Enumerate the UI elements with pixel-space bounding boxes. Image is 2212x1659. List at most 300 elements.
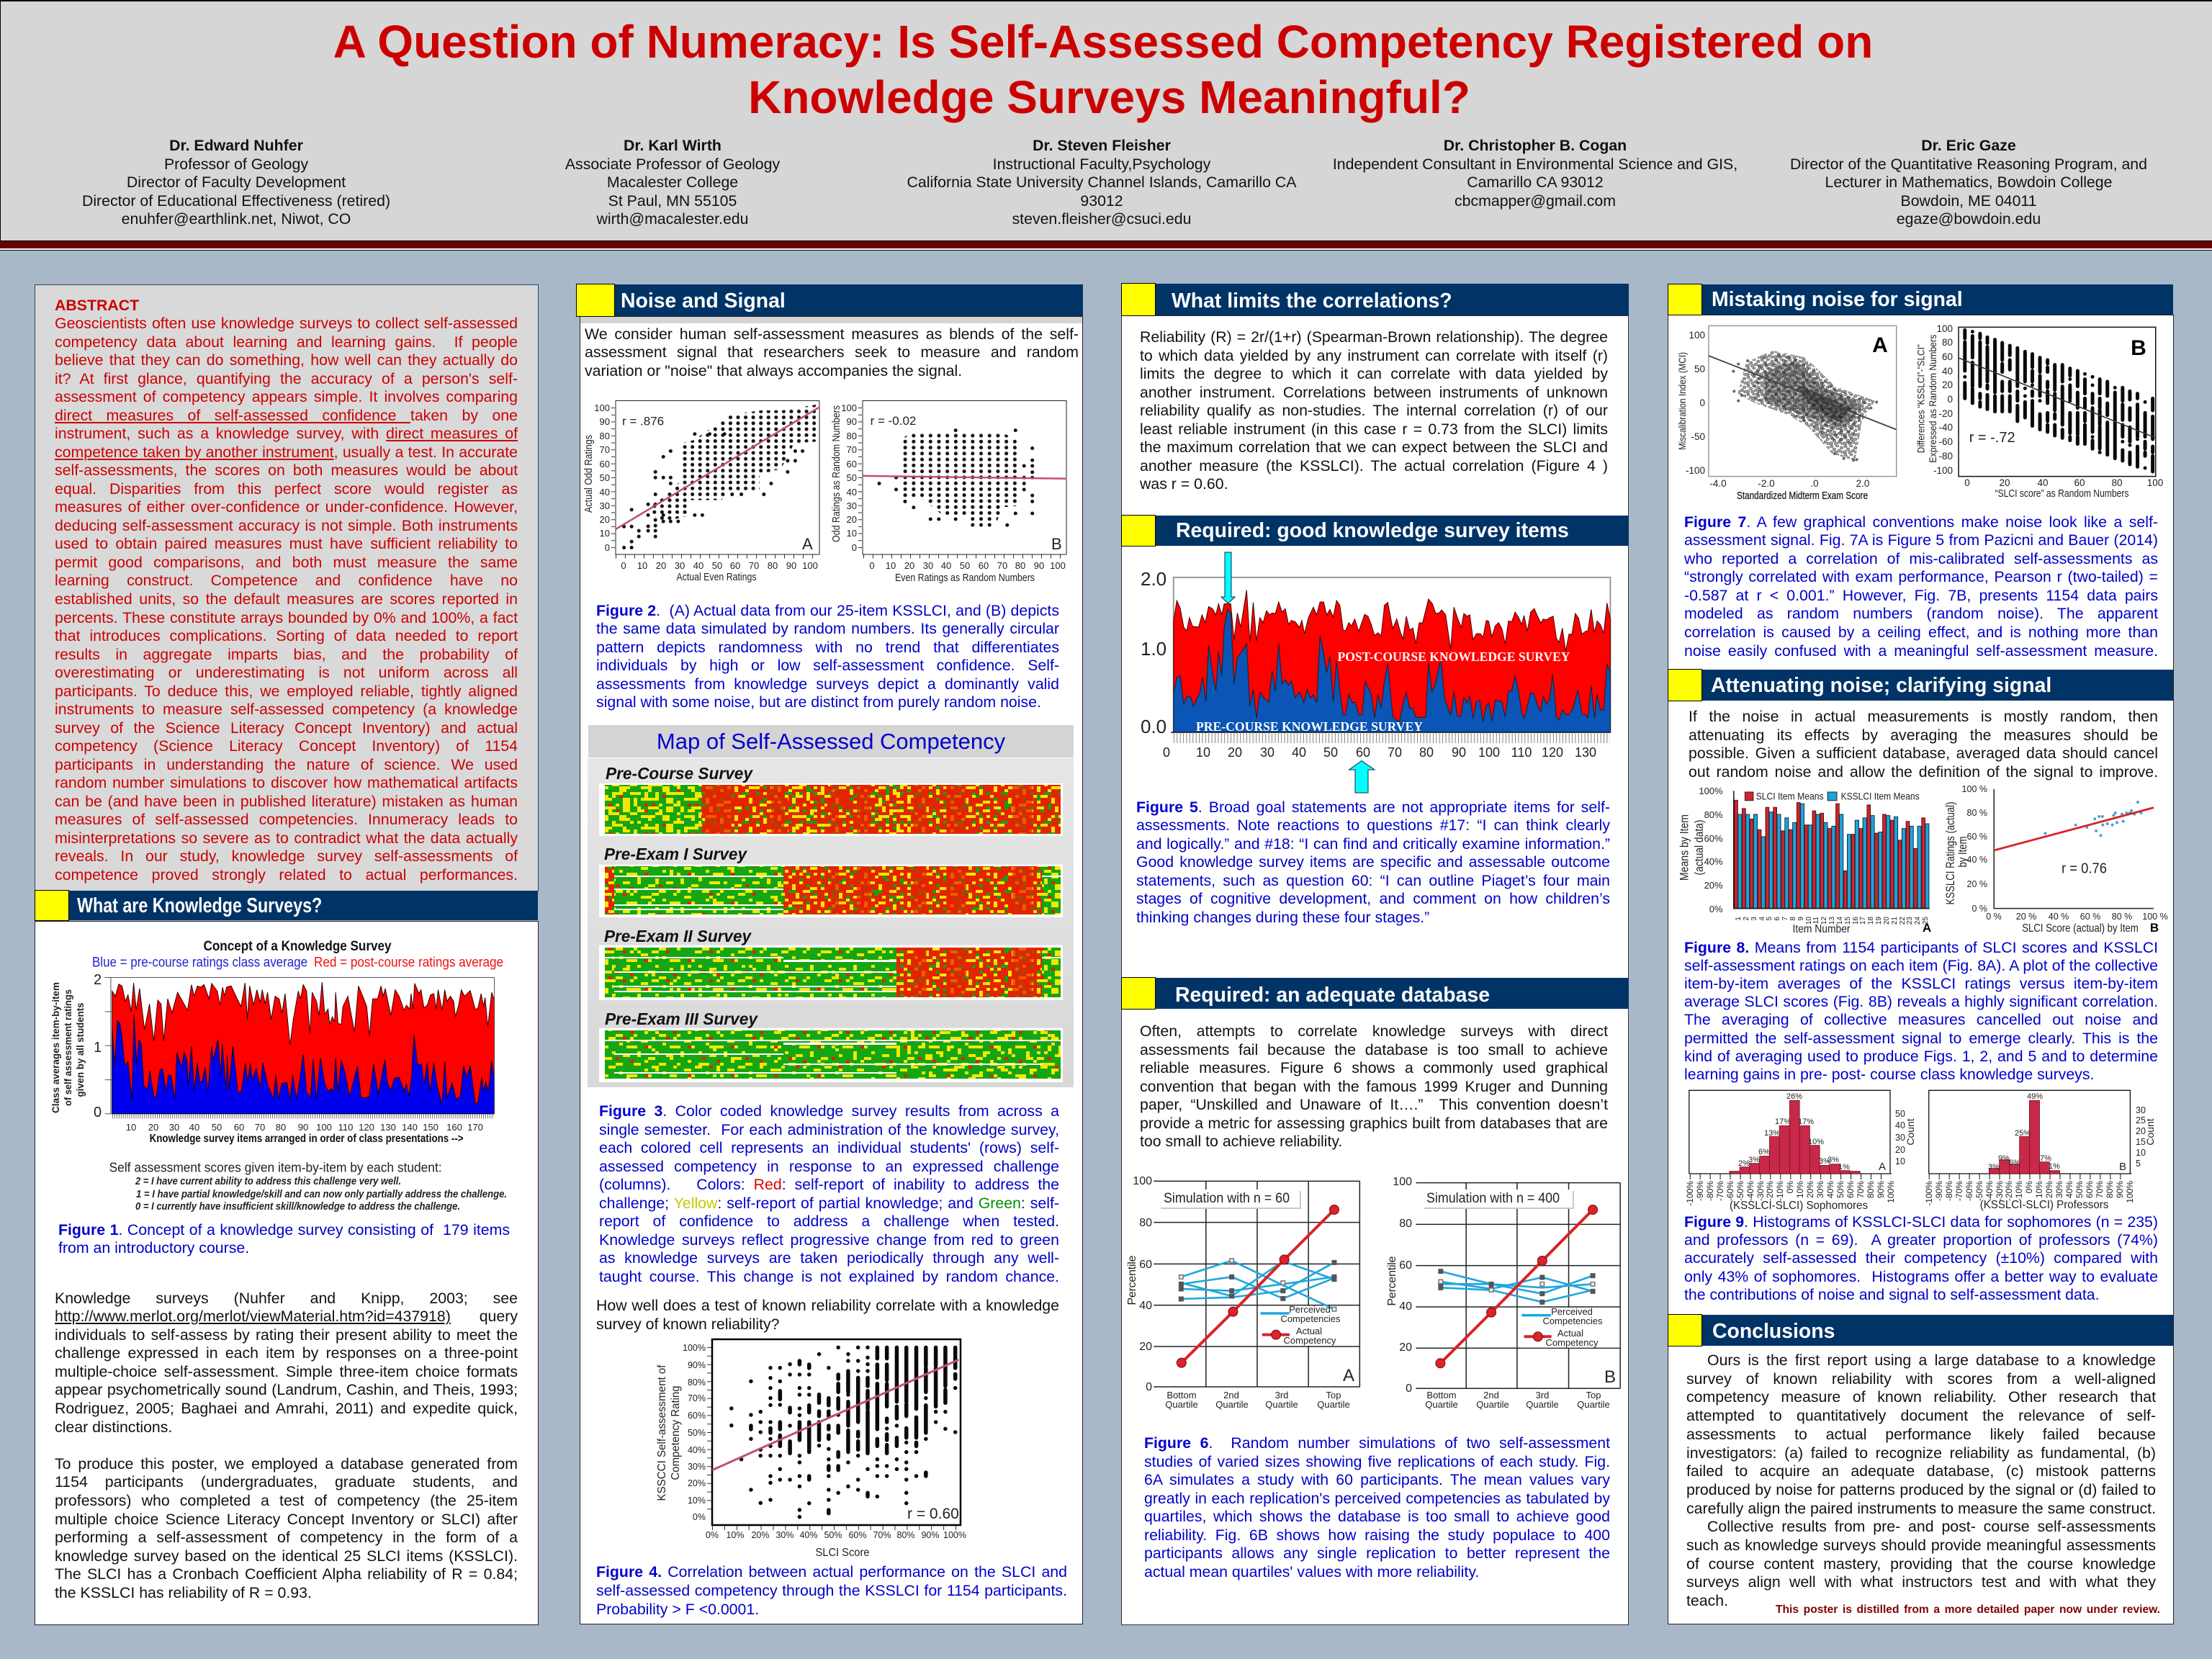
figure 5 x labels (1163, 745, 1596, 760)
figure 1 x tick labels: 140 (402, 1122, 418, 1133)
abstract text: can be (and have been in published literature) mistaken as human (55, 793, 518, 810)
figure 2A scatter: actual ratings: A (802, 535, 813, 553)
attenuating text: attenuating its effects by averaging the measures should be (1689, 726, 2158, 743)
figure 2A scatter: actual ratings: 100 (594, 403, 610, 413)
figure 7B scatter: random numbers: 80 (1942, 337, 1953, 348)
abstract text: instruments to measure self-assessed competency (a knowledge (55, 701, 518, 718)
heatmap: pre-course survey: Pre-Course Survey (606, 764, 753, 783)
author: Wirth: Macalester College (607, 174, 738, 191)
figure 2 caption: individuals by high or low self-assessment confidence. Self- (596, 657, 1059, 674)
figure 6B line chart: n = 400: Quartile (1476, 1399, 1509, 1410)
figure 6B line chart: n = 400: Top (1586, 1390, 1601, 1401)
author: Fleisher (907, 137, 1296, 228)
figure 8A bar chart: item means: 1 (1735, 917, 1743, 921)
figure 7B scatter: random numbers: “SLCI score” as Random Numbers (1995, 487, 2128, 500)
heading: attenuating noise: Attenuating noise; clarifying signal (1711, 674, 2051, 697)
figure 8A bar chart: item means: 10 (1805, 917, 1813, 925)
figure 6B line chart: n = 400 (1386, 1176, 1620, 1410)
heading: what are knowledge surveys (35, 891, 538, 920)
figure 2B scatter: random numbers: 90 (847, 416, 857, 427)
figure 8A bar chart: item means: Means by Item (1677, 814, 1691, 881)
figure 8A bar chart: item means (1677, 786, 1931, 935)
figure 3 caption: single semester. For each administration of the knowledge survey, (599, 1120, 1059, 1138)
figure 3 caption: challenge; Yellow: self-report of partial knowledge; and Green: self- (599, 1194, 1059, 1211)
figure 8B scatter: item correlation: 80 % (2112, 912, 2132, 922)
figure 7B scatter: random numbers: B (2131, 336, 2146, 360)
figure 9A histogram: sophomores: 10 (1895, 1156, 1905, 1166)
abstract text: participants in understanding the nature of science. We used (55, 756, 518, 773)
abstract text: it? At first glance, quantifying the accuracy of a person's self- (55, 370, 518, 387)
figure 6A line chart: n = 60: 80 (1139, 1217, 1152, 1229)
figure 9B histogram: professors: 9% (1998, 1154, 2010, 1163)
abstract text: survey of the Science Literacy Concept Inventory) and actual (55, 719, 518, 737)
author: Fleisher: California State University Channel Islands, Camarillo CA (907, 174, 1296, 191)
figure 2B scatter: random numbers: 50 (847, 472, 857, 483)
figure 6B line chart: n = 400: 100 (1393, 1176, 1412, 1188)
figure 9B histogram: professors: 49% (2027, 1092, 2043, 1101)
figure 8 caption: Figure 8. Means from 1154 participants of SLCI scores and KSSLCI (1684, 939, 2158, 956)
figure 6B line chart: n = 400: Quartile (1577, 1399, 1610, 1410)
knowledge surveys text: professors) who completed a test of competency (the 25-item (55, 1492, 518, 1509)
correlations text: another measure (the KSSLCI). The actual correlation (Figure 4 ) (1140, 457, 1608, 474)
figure 6A line chart: n = 60: Competencies (1280, 1313, 1341, 1324)
figure 1 y axis title (50, 982, 86, 1113)
figure 9A histogram: sophomores: 13% (1764, 1129, 1780, 1138)
figure 7 caption: noise easily confused with a meaningful self-assessment measure. (1684, 642, 2158, 660)
figure 7B scatter: random numbers: -40 (1938, 422, 1953, 433)
correlations text (1140, 328, 1608, 493)
abstract text: competency data about learning and learning gains. If people (55, 333, 518, 351)
figure 1 rating scale: 0 = I currently have insufficient skill/knowledge to address the challenge. (135, 1200, 460, 1213)
heatmap: pre-exam I survey (599, 845, 1063, 917)
figure 4 scatter: 40% (799, 1530, 818, 1540)
figure 2B scatter: random numbers: 10 (847, 528, 857, 539)
figure 9A histogram: sophomores: 0% (1785, 1181, 1795, 1193)
figure 8B scatter: item correlation: 60 % (2080, 912, 2100, 922)
figure 7B scatter: random numbers: -100 (1933, 465, 1953, 476)
figure 7A scatter: miscalibration index: 50 (1694, 364, 1705, 374)
abstract text: measures of self-assessed competencies. Innumeracy leads to (55, 811, 518, 828)
figure 6A line chart: n = 60: 40 (1139, 1300, 1152, 1312)
figure 7B scatter: random numbers: 60 (1942, 351, 1953, 362)
heading: conclusions: Conclusions (1712, 1320, 1835, 1343)
figure 6B line chart: n = 400: Simulation with n = 400 (1426, 1191, 1560, 1206)
figure 6A line chart: n = 60: 3rd (1275, 1390, 1288, 1401)
figure 9A histogram: sophomores: (KSSLCI-SLCI) Sophomores (1730, 1200, 1868, 1212)
figure 6A line chart: n = 60: Competency (1284, 1335, 1336, 1346)
figure 2B scatter: random numbers: 0 (869, 560, 875, 571)
author: Nuhfer: Professor of Geology (164, 156, 308, 173)
figure 1 x tick labels: 90 (298, 1122, 308, 1133)
figure 6 caption: greatly in each replication's perceived competencies as tabulated by (1144, 1489, 1610, 1506)
figure 8B scatter: item correlation: r = 0.76 (2062, 861, 2107, 877)
figure 6B line chart: n = 400: 2nd (1483, 1390, 1499, 1401)
attenuating text: If the noise in actual measurements is mostly random, then (1689, 708, 2158, 725)
figure 8 caption (1684, 939, 2158, 1083)
panel: noise signal conclusions (1668, 315, 2174, 1624)
figure 5 x labels: 130 (1575, 745, 1596, 760)
figure 2B scatter: random numbers: 80 (1015, 560, 1025, 571)
figure 5 x labels: 100 (1478, 745, 1500, 760)
abstract text: self-assessments, the scores on both measures would be about (55, 462, 518, 479)
abstract text: competence proved strongly related to actual performances. (55, 866, 518, 884)
figure 7B scatter: random numbers: -20 (1938, 408, 1953, 419)
correlations text: reliability qualify as non-studies. The internal correlation (r) of our (1140, 402, 1608, 419)
conclusions text: investigators: (a) failed to recognize reliability as fundamental, (b) (1686, 1444, 2156, 1462)
conclusions text: Collective results from pre- and post- course self-assessments (1707, 1518, 2156, 1535)
figure 7 caption: correlation is caused by a ceiling effect, and is nothing more than (1684, 624, 2158, 641)
figure 2A scatter: actual ratings: 30 (600, 500, 610, 511)
figure 9A histogram: sophomores: 10% (1795, 1181, 1805, 1198)
figure 8A bar chart: item means: 19 (1875, 917, 1883, 925)
figure 6A line chart: n = 60: Simulation with n = 60 (1164, 1191, 1290, 1206)
figure 9A histogram: sophomores: 100% (1886, 1181, 1896, 1203)
figure 1 x tick labels: 110 (338, 1122, 353, 1133)
figure 5 x labels: 10 (1196, 745, 1210, 760)
figure 9B histogram: professors: 50% (2074, 1181, 2085, 1198)
figure 1 x tick labels (126, 1122, 483, 1133)
figure 5 caption: and logically.” and #18: “I can find and critically examine information.” (1136, 835, 1610, 853)
figure 6 caption: reliability. Fig. 6B shows how raising the study populace to 400 (1144, 1527, 1610, 1544)
figure 7A scatter: miscalibration index (1676, 325, 1897, 502)
author: Nuhfer: Director of Educational Effectiveness (retired) (82, 192, 390, 209)
figure 7 caption: -0.587 at r < 0.001.” However, Fig. 7B, presents 1154 data pairs (1684, 587, 2158, 604)
figure 7 caption: who reported a correlation of mis-calibrated self-assessments as (1684, 550, 2158, 567)
figure 9B histogram: professors: -100% (1924, 1181, 1934, 1206)
figure 6A line chart: n = 60: A (1343, 1366, 1354, 1385)
abstract text: participants. To deduce this, we employed reliable, tightly aligned (55, 683, 518, 700)
figure 9A histogram: sophomores: 40% (1825, 1181, 1835, 1198)
abstract text: misinterpretations so severe as to contradict what the data actually (55, 830, 518, 847)
noise and signal intro text: assessment signal that researchers seek to measure and random (585, 343, 1079, 361)
figure 1 x tick labels: 120 (359, 1122, 374, 1133)
author: Gaze: Dr. Eric Gaze (1921, 137, 2016, 154)
figure 8B scatter: item correlation: 20 % (2016, 912, 2036, 922)
figure 8A bar chart: item means: 11 (1812, 917, 1820, 924)
figure 2A scatter: actual ratings: 60 (730, 560, 740, 571)
correlations text: limits the degree to which it can correlate with data yielded by (1140, 365, 1608, 382)
figure 4 scatter (656, 1339, 966, 1559)
figure 8B scatter: item correlation: 0 % (1972, 904, 1987, 914)
figure 9A histogram: sophomores: 40 (1895, 1120, 1905, 1130)
figure 2A scatter: actual ratings: 10 (637, 560, 647, 571)
figure 6A line chart: n = 60: Top (1326, 1390, 1341, 1401)
figure 1 rating scale: Self assessment scores given item-by-item by each student: (109, 1161, 442, 1175)
knowledge surveys text: challenge expressed in each item by responses on a three-point (55, 1344, 518, 1362)
figure 2A scatter: actual ratings: 30 (675, 560, 685, 571)
figure 2A scatter: actual ratings: 20 (656, 560, 666, 571)
figure 2B scatter: random numbers: 100 (841, 403, 857, 413)
figure 9B histogram: professors (1924, 1090, 2156, 1211)
figure 1 rating scale: 1 = I have partial knowledge/skill and can now only partially address the challenge. (136, 1188, 507, 1200)
figure 9B histogram: professors: -40% (1984, 1181, 1995, 1201)
figure 5 x labels: 40 (1292, 745, 1306, 760)
figure 4 scatter: 60% (688, 1411, 706, 1421)
figure 8 caption: The averaging of collective measures cancelled out noise and (1684, 1011, 2158, 1028)
figure 6 caption: studies of varied sizes showing five replications of each study. Fig. (1144, 1453, 1610, 1470)
figure 8A bar chart: item means: 7 (1781, 917, 1789, 921)
author: Wirth (565, 137, 781, 228)
figure 8 caption: learning gains in pre- post- course class knowledge surveys. (1684, 1066, 2094, 1083)
figure 9B histogram: professors: 7% (2040, 1154, 2051, 1163)
figure 9B histogram: professors: Count (2144, 1118, 2156, 1146)
author: Fleisher: Dr. Steven Fleisher (1033, 137, 1171, 154)
figure 6 caption: actual mean quartiles' values with more reliability. (1144, 1563, 1479, 1580)
figure 2B scatter: random numbers: 30 (847, 500, 857, 511)
figure 9B histogram: professors: B (2119, 1161, 2126, 1173)
abstract text: percents. These constitute arrays bounded by 0% and 100%, a fact (55, 609, 518, 626)
figure 8A bar chart: item means: 15 (1844, 917, 1852, 925)
figure 9A histogram: sophomores: 30% (1815, 1181, 1825, 1198)
author: Cogan: Camarillo CA 93012 (1467, 174, 1604, 191)
figure 6A line chart: n = 60: 0 (1146, 1381, 1152, 1393)
figure 7A scatter: miscalibration index: 2.0 (1856, 478, 1869, 489)
figure 1 y axis title: given by all students (74, 1002, 86, 1097)
figure 4 scatter: SLCI Score (815, 1547, 870, 1559)
figure 9A histogram: sophomores: 30 (1895, 1133, 1905, 1143)
arrow: items 17 and 18 (1221, 552, 1235, 603)
title (333, 16, 1873, 123)
figure 7B scatter: random numbers: Differences “KSSLCI”-“SLCI” (1915, 344, 1927, 453)
author: Gaze: Lecturer in Mathematics, Bowdoin College (1825, 174, 2112, 191)
knowledge surveys text: The SLCI has a Cronbach Coefficient Alpha reliability of R = 0.84; (55, 1565, 518, 1583)
figure 8B scatter: item correlation: SLCI Score (actual) by Item (2022, 922, 2139, 935)
figure 8A bar chart: item means: Item Number (1793, 923, 1851, 935)
figure 4 caption (596, 1563, 1067, 1618)
figure 2A scatter: actual ratings: 20 (600, 514, 610, 525)
figure 2A scatter: actual ratings: 0 (621, 560, 626, 571)
abstract text: measures of either over-confidence or under-confidence. However, (55, 498, 518, 516)
figure 8 caption: item-by-item averages of the KSSLCI ratings versus item-by-item (1684, 975, 2158, 992)
figure 2B scatter: random numbers: 50 (960, 560, 970, 571)
database text (1140, 1022, 1608, 1150)
figure 9A histogram: sophomores: 1% (1838, 1163, 1850, 1172)
figure 5 x labels: 110 (1511, 745, 1532, 760)
figure 4 scatter: 30% (688, 1462, 706, 1472)
figure 9B histogram: professors: 80% (2105, 1181, 2115, 1198)
figure 9A histogram: sophomores: 20% (1805, 1181, 1815, 1198)
abstract text: overestimating or underestimating is not uniform across all (55, 664, 518, 681)
figure 6 caption: Figure 6. Random number simulations of two self-assessment (1144, 1434, 1610, 1452)
figure 9A histogram: sophomores: 3% (1819, 1157, 1830, 1166)
figure 2A scatter: actual ratings: 100 (802, 560, 818, 571)
knowledge surveys text: appear psychometrically sound (Landrum, Cashin, and Theis, 1993; (55, 1381, 518, 1398)
figure 7B scatter: random numbers: -60 (1938, 436, 1953, 447)
figure 4 scatter: 0% (693, 1512, 706, 1522)
figure 9A histogram: sophomores: -40% (1745, 1181, 1755, 1201)
figure 1 x tick labels: 160 (446, 1122, 462, 1133)
figure 3 caption: as knowledge surveys are taken periodically through any well- (599, 1249, 1059, 1267)
figure 9A histogram: sophomores: -30% (1755, 1181, 1766, 1201)
figure 9A histogram: sophomores: 26% (1786, 1092, 1802, 1101)
figure 9A histogram: sophomores: 10% (1808, 1138, 1824, 1146)
figure 7A scatter: miscalibration index: .0 (1810, 478, 1819, 489)
figure 6B line chart: n = 400: 60 (1399, 1259, 1412, 1272)
figure 5 caption: Figure 5. Broad goal statements are not appropriate items for self- (1136, 798, 1610, 815)
figure 8A bar chart: item means: 18 (1867, 917, 1875, 925)
figure 2B scatter: random numbers: 60 (979, 560, 989, 571)
figure 6A line chart: n = 60: 60 (1139, 1259, 1152, 1271)
figure 2B scatter: random numbers: 60 (847, 459, 857, 469)
figure 8A bar chart: item means: 8 (1789, 917, 1797, 921)
figure 2B scatter: random numbers: r = -0.02 (871, 414, 916, 428)
figure 3 caption: taught course. This change is not explained by random chance. (599, 1267, 1059, 1285)
figure 9A histogram: sophomores: 6% (1758, 1148, 1770, 1156)
figure 2 caption: Figure 2. (A) Actual data from our 25-item KSSLCI, and (B) depicts (596, 602, 1059, 619)
figure 6A line chart: n = 60: Quartile (1317, 1399, 1350, 1410)
figure 2B scatter: random numbers: 40 (847, 487, 857, 498)
label: post-course survey: POST-COURSE KNOWLEDGE SURVEY (1338, 649, 1570, 664)
figure 1 rating scale: 2 = I have current ability to address this challenge very well. (135, 1175, 401, 1187)
author: Gaze (1790, 137, 2147, 228)
header band (0, 0, 2212, 241)
figure 7B scatter: random numbers: 40 (2037, 477, 2049, 488)
figure 2B scatter: random numbers: 40 (941, 560, 951, 571)
figure 8B scatter: item correlation: KSSLCI Ratings (actual) (1944, 802, 1957, 904)
figure 6 caption: participants allows any single replication to better represent the (1144, 1545, 1610, 1562)
figure 5 x labels: 30 (1260, 745, 1274, 760)
knowledge surveys text: performing a self-assessment of competency in the form of a (55, 1529, 518, 1546)
figure 8A bar chart: item means: A (1923, 921, 1931, 935)
figure 9B histogram: professors: -60% (1964, 1181, 1974, 1201)
figure 2B scatter: random numbers: 30 (923, 560, 933, 571)
figure 9B histogram: professors: 25% (2015, 1129, 2031, 1138)
figure 2B scatter: random numbers: 80 (847, 431, 857, 441)
conclusions text: assessments to actual performance likely failed because (1686, 1426, 2156, 1443)
attenuating text: possible. Given a sufficient database, averaged data should cancel (1689, 745, 2158, 762)
figure 9B histogram: professors: 15 (2136, 1137, 2146, 1147)
knowledge surveys text: http://www.merlot.org/merlot/viewMaterial.htm?id=437918) query (55, 1308, 518, 1325)
figure 9B histogram: professors: 30% (2054, 1181, 2064, 1198)
figure 8A legend (1745, 791, 1920, 802)
figure 6A line chart: n = 60: Bottom (1166, 1390, 1197, 1401)
figure 9B histogram: professors: 70% (2095, 1181, 2105, 1198)
knowledge surveys text: Knowledge surveys (Nuhfer and Knipp, 2003; see (55, 1289, 518, 1306)
figure 6B line chart: n = 400: 3rd (1536, 1390, 1549, 1401)
figure 9B histogram: professors: 10 (2136, 1148, 2146, 1158)
figure 4 scatter: 0% (706, 1530, 719, 1540)
figure 6B line chart: n = 400: 80 (1399, 1218, 1412, 1230)
figure 9B histogram: professors: (KSSLCI-SLCI) Professors (1980, 1199, 2108, 1211)
figure 8B scatter: item correlation: 0 % (1986, 912, 2002, 922)
conclusions text: surveys align well with what instructors test and with what they (1686, 1573, 2156, 1591)
figure 7A scatter: miscalibration index: -4.0 (1709, 478, 1727, 489)
figure 5 caption: statements, such as question 60: “I can outline Piaget’s four main (1136, 871, 1610, 889)
figure 5 y labels: 2.0 (1141, 568, 1166, 590)
figure 2 caption: the same data simulated by random numbers. Its generally circular (596, 620, 1059, 637)
attenuating text (1689, 708, 2158, 781)
figure 1 x tick labels: 170 (467, 1122, 483, 1133)
abstract text: ABSTRACT (55, 297, 139, 314)
figure 9B histogram: professors: -30% (1995, 1181, 2005, 1201)
figure 5 x labels: 120 (1542, 745, 1563, 760)
figure 4 scatter: 80% (688, 1377, 706, 1388)
figure 1 legend: Red = post-course ratings average (314, 955, 503, 971)
figure 2A scatter: actual ratings: Actual Odd Ratings (583, 435, 595, 513)
abstract text: equal. Disparities from this perfect score would register as (55, 480, 518, 498)
figure 6A line chart: n = 60: Quartile (1165, 1399, 1198, 1410)
panel: noise and signal (580, 316, 1083, 1624)
figure 7A scatter: miscalibration index: -2.0 (1758, 478, 1775, 489)
knowledge surveys text: individuals to self-assess by rating their present ability to meet the (55, 1326, 518, 1344)
figure 8A bar chart: item means: 23 (1906, 917, 1914, 925)
database text: paper, “Unskilled and Unaware of It….” This convention doesn’t (1140, 1096, 1608, 1113)
panel: abstract (35, 284, 539, 891)
figure 7 caption: assessment signal. Fig. 7A is Figure 5 from Pazicni and Bauer (2014) (1684, 531, 2158, 549)
figure 7B scatter: random numbers: 100 (2147, 477, 2163, 488)
figure 9A histogram: sophomores: Count (1905, 1118, 1916, 1146)
figure 5 area chart (1141, 552, 1610, 793)
abstract text: permit good comparisons, and both must measure the same (55, 554, 518, 571)
figure 2A scatter: actual ratings (583, 400, 819, 583)
figure 1 x tick labels: 60 (234, 1122, 244, 1133)
figure 2 caption: signal with some noise, but are distinct from purely random noise. (596, 693, 1041, 711)
figure 9 caption: accurately self-assessed their competency (±10%) compared with (1684, 1249, 2158, 1267)
figure 8B scatter: item correlation: B (2150, 921, 2159, 935)
figure 8A bar chart: item means: 20 (1883, 917, 1891, 925)
figure 5 caption: stages of cognitive development, and comment on how children’s (1136, 890, 1610, 907)
figure 2A scatter: actual ratings: 90 (600, 416, 610, 427)
knowledge surveys text: 1154 participants (undergraduates, graduate students, and (55, 1473, 518, 1491)
figure 6B line chart: n = 400: 40 (1399, 1300, 1412, 1313)
conclusions text: Ours is the first report using a large database to a knowledge (1707, 1352, 2156, 1369)
figure 9A histogram: sophomores: 3% (1827, 1156, 1839, 1164)
figure 3 caption (599, 1102, 1059, 1285)
figure 8A bar chart: item means: 2 (1743, 917, 1750, 921)
figure 5 y labels: 0.0 (1141, 716, 1166, 737)
figure 3 caption: each colored cell represents an individual students' (rows) self- (599, 1139, 1059, 1156)
conclusions text (1686, 1352, 2156, 1609)
heading: what limits the correlations: What limits the correlations? (1172, 289, 1452, 313)
figure 3 caption: report of confidence to address a challenge when tested. (599, 1213, 1059, 1230)
author: Wirth: Associate Professor of Geology (565, 156, 780, 173)
figure 8A bar chart: item means: 40% (1704, 856, 1723, 867)
figure 2A scatter: actual ratings: 90 (786, 560, 796, 571)
figure 5 x labels: 0 (1163, 745, 1170, 760)
conclusions text: attempted to quantitatively document the relevance of self- (1686, 1407, 2156, 1424)
figure 9B histogram: professors: 1% (2049, 1162, 2060, 1171)
author: Cogan: cbcmapper@gmail.com (1455, 192, 1616, 209)
figure 9B histogram: professors: 100% (2125, 1181, 2135, 1203)
knowledge surveys text: knowledge survey based on the identical 25 SLCI items (KSSLCI). (55, 1547, 518, 1565)
database text: Often, attempts to correlate knowledge surveys with direct (1140, 1022, 1608, 1040)
figure 9A histogram: sophomores: 50 (1895, 1109, 1905, 1119)
figure 1 area chart (105, 977, 495, 1114)
figure 6B line chart: n = 400: Quartile (1425, 1399, 1458, 1410)
figure 8B scatter: item correlation: 20 % (1967, 879, 1987, 889)
author: Fleisher: 93012 (1080, 192, 1123, 209)
figure 1 axis labels (94, 972, 102, 1120)
author: Fleisher: Instructional Faculty,Psychology (993, 156, 1210, 173)
knowledge surveys text: multiple choice Science Literacy Concept Inventory or SLCI) after (55, 1511, 518, 1528)
abstract text: assessment of competency appears simple. It involves comparing (55, 388, 518, 405)
figure 8A bar chart: item means: 20% (1704, 880, 1723, 891)
abstract text: instrument, such as a knowledge survey, with direct measures of (55, 425, 518, 442)
figure 9 caption: only 43% of sophomores. Histograms offer a better way to evaluate (1684, 1268, 2158, 1285)
figure 5 y labels (1141, 568, 1166, 737)
conclusions text: survey of known reliability with scores from a well-aligned (1686, 1370, 2156, 1388)
figure 6 caption: quartiles, which shows the database is too small to achieve good (1144, 1508, 1610, 1525)
conclusions text: carefully align the paired instruments to measure the same construct. (1686, 1500, 2156, 1517)
author: Gaze: Bowdoin, ME 04011 (1900, 192, 2037, 209)
title: Knowledge Surveys Meaningful? (748, 71, 1470, 123)
author: Cogan: Dr. Christopher B. Cogan (1444, 137, 1627, 154)
figure 1 x tick labels: 100 (316, 1122, 332, 1133)
figure 1 x tick labels: 80 (276, 1122, 286, 1133)
correlations text: least reliable instrument (in this case r = 0.73 from the SLCI) limits (1140, 421, 1608, 438)
figure 2 caption: assessments from knowledge surveys depict a dominantly valid (596, 675, 1059, 693)
figure 1 legend (92, 955, 503, 971)
